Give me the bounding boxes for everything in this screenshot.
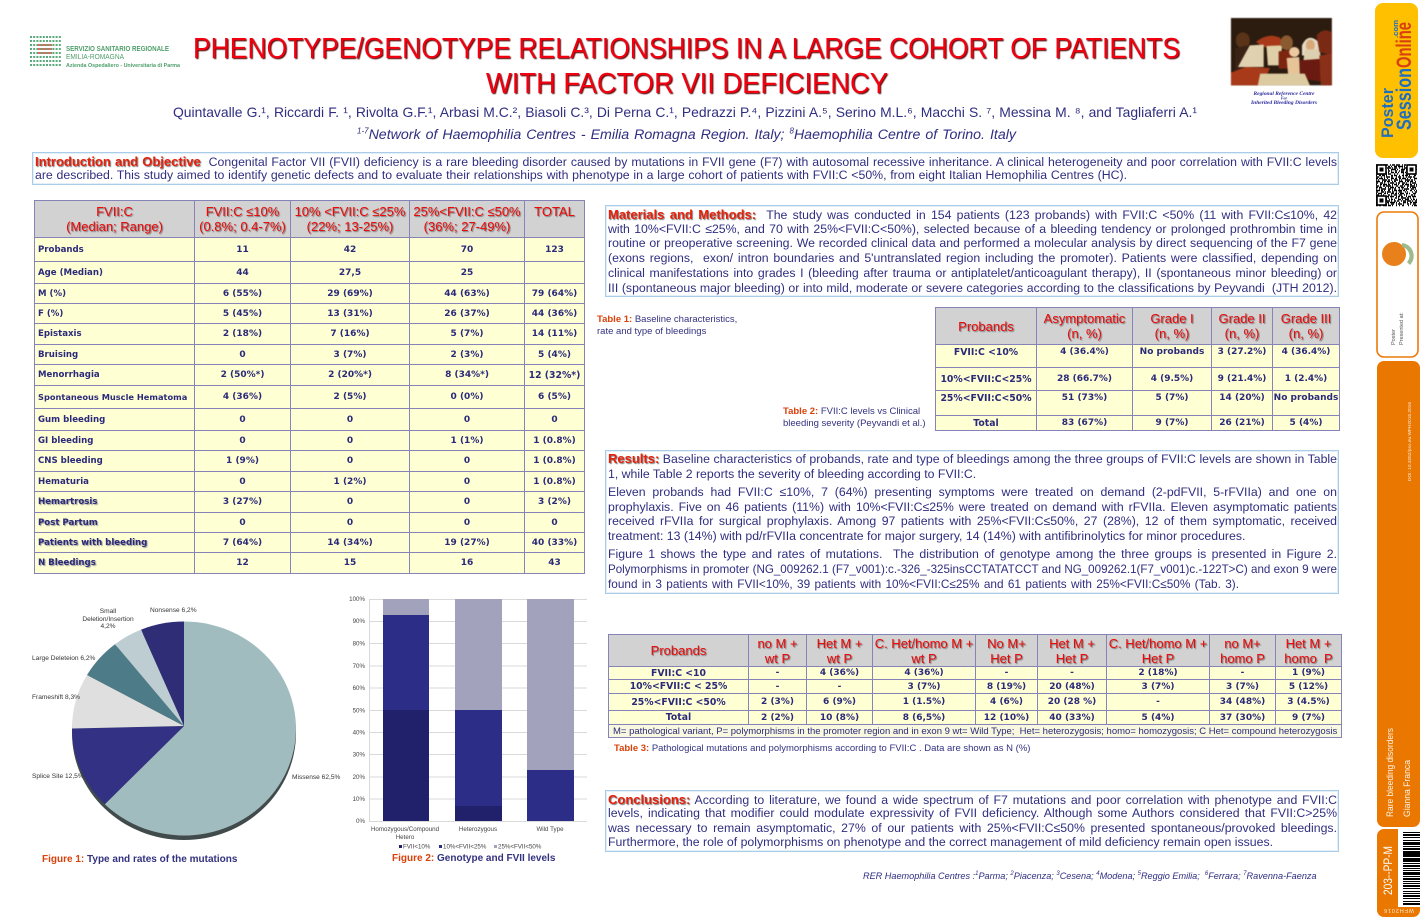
panel: materials and methods: clinical manifestations into grades I (bleeding after trauma or antiplatelet/anticoagulant therapy), II (spontaneous minor bleeding) or	[608, 266, 1337, 280]
table 3: pathological mutations and polymorphisms: no M +	[757, 636, 798, 651]
table 2: FVII:C levels vs clinical bleeding severity: 51 (73%)	[1062, 393, 1107, 403]
table 1: baseline characteristics: (22%; 13-25%)	[307, 219, 393, 234]
table 1: baseline characteristics: 2 (3%)	[451, 350, 483, 360]
table 3: pathological mutations and polymorphisms: 9 (7%)	[1292, 712, 1325, 722]
table 1: baseline characteristics: 1 (9%)	[226, 456, 259, 466]
table 1: baseline characteristics: 6 (5%)	[538, 392, 571, 402]
table 3: pathological mutations and polymorphisms: 25%<FVII:C <50%	[631, 696, 726, 708]
table 3: pathological mutations and polymorphisms: 8 (6,5%)	[903, 712, 945, 722]
table 3: pathological mutations and polymorphisms: 2 (18%)	[1138, 668, 1178, 678]
PosterSessionOnline logo panel: .com	[1391, 20, 1400, 38]
caption: table 1: rate and type of bleedings	[597, 326, 706, 337]
table 1: baseline characteristics: 1 (2%)	[334, 476, 366, 486]
table 3: pathological mutations and polymorphisms: 20 (48%)	[1049, 682, 1095, 692]
table 3: pathological mutations and polymorphisms: 2 (3%)	[761, 697, 794, 707]
table 1: baseline characteristics: Epistaxis	[38, 329, 82, 339]
panel: conclusions: was necessary to remain asymptomatic, 27% of our patients with 25%<FVII:C≤50% presented spontaneous/provoked bleedings.	[608, 821, 1337, 835]
table 3: pathological mutations and polymorphisms: 3 (7%)	[1226, 682, 1259, 692]
pie chart: type and rates of the mutations: Small	[100, 608, 117, 615]
table 2: FVII:C levels vs clinical bleeding severity: 3 (27.2%)	[1218, 347, 1266, 357]
table 1: baseline characteristics: 44 (36%)	[532, 308, 577, 318]
table 1: baseline characteristics: F (%)	[38, 308, 63, 318]
table 2: FVII:C levels vs clinical bleeding severity	[935, 307, 1340, 431]
table 3: pathological mutations and polymorphisms: C. Het/homo M +	[875, 636, 973, 651]
poster ID and barcode	[1377, 829, 1420, 917]
table 2: FVII:C levels vs clinical bleeding severity: Total	[973, 418, 999, 428]
table 1: baseline characteristics: 0	[464, 497, 470, 507]
table 2: FVII:C levels vs clinical bleeding severity: Probands	[958, 318, 1014, 334]
stacked bar chart: genotype and FVII levels: 10%<FVII<25%	[443, 844, 487, 850]
table 3: pathological mutations and polymorphisms: FVII:C <10	[651, 668, 706, 678]
table 3: pathological mutations and polymorphisms: -	[1005, 668, 1008, 678]
table 1: baseline characteristics: 0	[551, 518, 558, 528]
table 3: pathological mutations and polymorphisms: Het P	[990, 651, 1023, 666]
table 1: baseline characteristics: N Bleedings	[38, 558, 96, 568]
panel: conclusions: Furthermore, the role of polymorphisms on phenotype and the correct management of mild deficiency remain open issues.	[608, 835, 1273, 849]
sidebar: PosterSessionOnline	[1375, 3, 1420, 917]
presented at panel: Presented at:	[1399, 312, 1405, 345]
stacked bar chart: genotype and FVII levels: Heterozygous	[459, 826, 497, 833]
table 1: baseline characteristics: 0	[347, 518, 353, 528]
table 2: FVII:C levels vs clinical bleeding severity: (n, %)	[1289, 326, 1323, 341]
stacked bar chart: genotype and FVII levels: 70%	[353, 663, 365, 670]
table 1: baseline characteristics: 25%<FVII:C ≤50%	[413, 204, 521, 219]
table 1: baseline characteristics: 3 (7%)	[334, 350, 366, 360]
table 3: pathological mutations and polymorphisms: -	[1241, 668, 1244, 678]
table 1: baseline characteristics: 0	[347, 436, 353, 446]
table 1: baseline characteristics: 3 (27%)	[223, 497, 262, 507]
table 1: baseline characteristics: 14 (11%)	[532, 329, 577, 339]
table 2: FVII:C levels vs clinical bleeding severity: Grade II	[1219, 311, 1265, 326]
caption: table 3: Table 3: Pathological mutations and polymorphisms according to FVII:C . Data are shown as N (%)	[614, 743, 1030, 754]
table 1: baseline characteristics: 4 (36%)	[223, 392, 262, 402]
PosterSessionOnline logo panel: Online	[1393, 22, 1416, 68]
pie chart: type and rates of the mutations: Splice Site 12,5%	[32, 773, 84, 780]
table 1: baseline characteristics: 26 (37%)	[444, 308, 490, 318]
panel: introduction and objective	[32, 152, 1339, 185]
stacked bar chart: genotype and FVII levels: 0%	[356, 818, 365, 825]
poster ID and barcode: 203--PP-M	[1381, 846, 1395, 895]
stacked bar chart: genotype and FVII levels: 90%	[353, 618, 365, 625]
table 1: baseline characteristics: (36%; 27-49%)	[424, 219, 510, 234]
table 1: baseline characteristics	[34, 200, 585, 574]
stacked bar chart: genotype and FVII levels: 60%	[353, 685, 365, 692]
logo: Servizio Sanitario Regionale	[30, 36, 180, 69]
table 2: FVII:C levels vs clinical bleeding severity: No probands	[1140, 347, 1204, 357]
table 1: baseline characteristics: FVII:C	[96, 204, 133, 219]
table 1: baseline characteristics: 12	[236, 558, 249, 568]
caption: table 1	[597, 314, 737, 337]
table 1: baseline characteristics: 0	[239, 436, 246, 446]
table 3: pathological mutations and polymorphisms: M= pathological variant, P= polymorphisms in the promoter region and in exon 9 wt= Wild Type; Het= heterozygosis; homo= homozygosis; C Het= compound heterozygosis	[613, 726, 1337, 736]
table 2: FVII:C levels vs clinical bleeding severity: 10%<FVII:C<25%	[940, 374, 1032, 384]
table 3: pathological mutations and polymorphisms: C. Het/homo M +	[1109, 636, 1207, 651]
table 1: baseline characteristics: TOTAL	[534, 204, 575, 219]
table 3: pathological mutations and polymorphisms: 37 (30%)	[1220, 712, 1265, 722]
table 3: pathological mutations and polymorphisms: -	[1070, 668, 1074, 678]
table 1: baseline characteristics: 0 (0%)	[451, 392, 483, 402]
table 3: pathological mutations and polymorphisms: no M+	[1224, 636, 1261, 651]
table 3: pathological mutations and polymorphisms: No M+	[987, 636, 1026, 651]
table 1: baseline characteristics: 0	[464, 476, 470, 486]
stacked bar chart: genotype and FVII levels: 25%<FVII<50%	[498, 844, 542, 850]
table 3: pathological mutations and polymorphisms: wt P	[765, 651, 790, 666]
table 1: baseline characteristics: 12 (32%*)	[529, 370, 580, 380]
table 1: baseline characteristics: 0	[464, 518, 470, 528]
table 1: baseline characteristics: Spontaneous Muscle Hematoma	[38, 392, 187, 402]
table 2: FVII:C levels vs clinical bleeding severity: (n, %)	[1067, 326, 1102, 341]
table 1: baseline characteristics: 2 (20%*)	[328, 370, 372, 380]
title	[193, 33, 1181, 100]
panel: results: prophylaxis. Five on 46 patients (11%) with 10%<FVII:C≤25% were treated on demand with rFVIIa. Eleven asymptomatic patients	[608, 500, 1337, 514]
table 1: baseline characteristics: 79 (64%)	[532, 288, 577, 298]
stacked bar chart: genotype and FVII levels: 100%	[349, 596, 365, 603]
table 1: baseline characteristics: 0	[347, 497, 353, 507]
table 1: baseline characteristics: (0.8%; 0.4-7%)	[199, 219, 286, 234]
table 3: pathological mutations and polymorphisms: 10%<FVII:C < 25%	[630, 681, 727, 692]
table 1: baseline characteristics: 1 (0.8%)	[533, 436, 576, 446]
table 3: pathological mutations and polymorphisms: 3 (7%)	[1142, 682, 1174, 692]
table 1: baseline characteristics: 0	[239, 350, 246, 360]
panel: results: treatment: 13 (14%) with pd/rFVIIa concentrate for major surgery, 14 (14%) with antifibrinolytics for minor procedures.	[608, 529, 1245, 543]
image: painting and regional centre: Regional Reference Centre	[1253, 91, 1315, 97]
logo: Servizio Sanitario Regionale: SERVIZIO SANITARIO REGIONALE	[66, 46, 169, 53]
table 3: pathological mutations and polymorphisms: 34 (48%)	[1220, 697, 1265, 707]
table 3: pathological mutations and polymorphisms: 4 (6%)	[990, 697, 1023, 707]
table 1: baseline characteristics: 5 (45%)	[223, 308, 262, 318]
table 1: baseline characteristics: 11	[236, 244, 249, 254]
authors: Quintavalle G.¹, Riccardi F. ¹, Rivolta G.F.¹, Arbasi M.C.², Biasoli C.³, Di Perna C.¹, Pedrazzi P.⁴, Pizzini A.⁵, Serino M.L.⁶, Macchi S. ⁷, Messina M. ⁸, and Tagliaferri A.¹	[173, 104, 1197, 120]
table 1: baseline characteristics: 10% <FVII:C ≤25%	[295, 204, 405, 219]
table 3: pathological mutations and polymorphisms: 3 (4.5%)	[1287, 697, 1330, 707]
table 3: pathological mutations and polymorphisms: 20 (28 %)	[1048, 697, 1096, 707]
poster ID and barcode: WFH2016	[1384, 907, 1414, 913]
table 3: pathological mutations and polymorphisms: 8 (19%)	[987, 682, 1026, 692]
table 2: FVII:C levels vs clinical bleeding severity: 28 (66.7%)	[1057, 374, 1112, 384]
caption: table 2: Table 2: FVII:C levels vs Clinical	[783, 406, 920, 417]
caption: figure 1: Figure 1: Type and rates of the mutations	[42, 854, 237, 865]
table 1: baseline characteristics: Hematuria	[38, 476, 89, 486]
pie chart: type and rates of the mutations: 4,2%	[100, 623, 116, 630]
caption: table 2	[783, 406, 926, 429]
title: WITH FACTOR VII DEFICIENCY	[486, 68, 888, 100]
pie chart: type and rates of the mutations: Large Deleteion 6,2%	[32, 655, 96, 662]
table 2: FVII:C levels vs clinical bleeding severity: 26 (21%)	[1219, 418, 1265, 428]
table 1: baseline characteristics: 29 (69%)	[327, 288, 373, 298]
table 1: baseline characteristics: 123	[545, 244, 564, 254]
table 3: pathological mutations and polymorphisms: 4 (36%)	[820, 668, 859, 678]
table 1: baseline characteristics: 42	[344, 244, 356, 254]
table 2: FVII:C levels vs clinical bleeding severity: 4 (36.4%)	[1060, 347, 1109, 357]
table 3: pathological mutations and polymorphisms: 4 (36%)	[904, 668, 944, 678]
table 2: FVII:C levels vs clinical bleeding severity: Asymptomatic	[1044, 311, 1125, 326]
table 1: baseline characteristics: 6 (55%)	[223, 288, 262, 298]
pie chart: type and rates of the mutations	[32, 607, 341, 840]
table 1: baseline characteristics: 19 (27%)	[444, 538, 490, 548]
table 3: pathological mutations and polymorphisms: wt P	[911, 651, 937, 666]
image: painting and regional centre	[1230, 17, 1333, 106]
table 3: pathological mutations and polymorphisms: Probands	[651, 643, 706, 658]
PosterSessionOnline logo panel: Session	[1393, 68, 1416, 130]
panel: conclusions: Conclusions: According to literature, we found a wide spectrum of F7 mutations and poor correlation with phenotype and FVII:C	[608, 792, 1337, 807]
table 1: baseline characteristics: 3 (2%)	[538, 497, 571, 507]
panel: conclusions	[605, 790, 1339, 852]
logo: Servizio Sanitario Regionale: Azienda Ospedaliero - Universitaria di Parma	[66, 63, 180, 69]
table 3: pathological mutations and polymorphisms: 5 (4%)	[1142, 712, 1174, 722]
table 3: pathological mutations and polymorphisms: 2 (2%)	[761, 712, 794, 722]
table 2: FVII:C levels vs clinical bleeding severity: (n, %)	[1225, 326, 1259, 341]
table 1: baseline characteristics: 0	[239, 518, 246, 528]
pie chart: type and rates of the mutations: Missense 62,5%	[292, 774, 341, 781]
panel: results: 1, while Table 2 reports the severity of bleeding according to FVII:C.	[608, 467, 976, 481]
table 3: pathological mutations and polymorphisms: Het M +	[1049, 636, 1095, 651]
table 1: baseline characteristics: 25	[461, 268, 473, 278]
table 3: pathological mutations and polymorphisms: -	[838, 682, 841, 692]
stacked bar chart: genotype and FVII levels: 10%	[353, 796, 365, 803]
table 1: baseline characteristics: 0	[551, 414, 558, 424]
panel: results: Eleven probands had FVII:C ≤10%, 7 (64%) presenting symptoms were treated on demand (2-pdFVII, 5-rFVIIa) and one on	[608, 485, 1337, 499]
table 1: baseline characteristics: 1 (0.8%)	[533, 476, 576, 486]
table 1: baseline characteristics: 5 (4%)	[538, 350, 571, 360]
table 3: pathological mutations and polymorphisms: wt P	[827, 651, 852, 666]
table 2: FVII:C levels vs clinical bleeding severity: Grade I	[1150, 311, 1194, 326]
panel: introduction and objective: Introduction and Objective Congenital Factor VII (FVII) deficiency is a rare bleeding disorder caused by mutations in FVII gene (F7) with autosomal recessive inheritance. A clinical heterogeneity and poor correlation with FVII:C levels	[35, 154, 1337, 169]
panel: results: found in 3 patients with FVII<10%, 39 patients with 10%<FVII:C≤25% and 61 patients with 25%<FVII:C≤50% (Tab. 3).	[608, 577, 1239, 591]
panel: introduction and objective: are described. This study aimed to identify genetic defects and to evaluate their relationships with phenotype in a large cohort of patients with FVII:C <50%, from eight Italian Hemophilia Centres (HC).	[35, 168, 1127, 182]
panel: conclusions: levels, indicating that modifier could modulate expressivity of FVII deficiency. Although some Authors considered that FVII:C>25%	[608, 806, 1337, 820]
table 1: baseline characteristics: 0	[464, 414, 470, 424]
table 1: baseline characteristics: CNS bleeding	[38, 456, 103, 466]
table 1: baseline characteristics: FVII:C ≤10%	[206, 204, 279, 219]
panel: results: received rFVIIa for surgical prophylaxis. Among 97 patients with 25%<FVII:C≤50%, 27 (28%), 12 of them symptomatic, received	[608, 514, 1337, 528]
table 2: FVII:C levels vs clinical bleeding severity: 4 (36.4%)	[1282, 347, 1330, 357]
table 1: baseline characteristics: 0	[347, 456, 353, 466]
table 1: baseline characteristics: Post Partum	[38, 518, 98, 528]
image: painting and regional centre: For	[1281, 96, 1288, 100]
topic panel	[1377, 361, 1420, 827]
image: painting and regional centre: Inherited Bleeding Disorders	[1250, 100, 1317, 106]
PosterSessionOnline logo panel: Poster	[1378, 88, 1397, 138]
table 1: baseline characteristics: 2 (50%*)	[221, 370, 264, 380]
table 2: FVII:C levels vs clinical bleeding severity: 14 (20%)	[1219, 393, 1265, 403]
table 1: baseline characteristics: Age (Median)	[38, 268, 103, 278]
caption: figure 2: Figure 2: Genotype and FVII levels	[392, 853, 555, 864]
table 1: baseline characteristics: 27,5	[339, 268, 361, 278]
PosterSessionOnline logo panel	[1375, 3, 1418, 158]
table 1: baseline characteristics: 2 (5%)	[334, 392, 366, 402]
footnote: RER haemophilia centres: RER Haemophilia Centres :1Parma; 2Piacenza; 3Cesena; 4Modena; 5Reggio Emilia; 6Ferrara; 7Ravenna-Faenza	[863, 871, 1317, 881]
table 1: baseline characteristics: 2 (18%)	[223, 329, 262, 339]
table 1: baseline characteristics: 13 (31%)	[327, 308, 373, 318]
panel: materials and methods: routine or preoperative screening. We recorded clinical data and performed a molecular analysis by direct sequencing of the F7 gene	[608, 236, 1337, 250]
table 1: baseline characteristics: 0	[347, 414, 353, 424]
table 2: FVII:C levels vs clinical bleeding severity: 5 (4%)	[1290, 418, 1322, 428]
table 1: baseline characteristics: Gum bleeding	[38, 414, 105, 424]
table 3: pathological mutations and polymorphisms: 1 (1.5%)	[903, 697, 945, 707]
table 1: baseline characteristics: Hemartrosis	[38, 497, 97, 507]
panel: materials and methods: Materials and Methods: The study was conducted in 154 patients (123 probands) with FVII:C <50% (11 with FVII:C≤10%, 42	[608, 207, 1337, 222]
table 3: pathological mutations and polymorphisms: Het M +	[1286, 636, 1331, 651]
table 1: baseline characteristics: 40 (33%)	[532, 538, 577, 548]
table 2: FVII:C levels vs clinical bleeding severity: Grade III	[1281, 311, 1331, 326]
caption: table 1: Table 1: Baseline characteristics,	[597, 314, 737, 325]
stacked bar chart: genotype and FVII levels: Hetero	[396, 834, 415, 841]
table 1: baseline characteristics: 70	[461, 244, 473, 254]
table 1: baseline characteristics: 14 (34%)	[327, 538, 373, 548]
table 2: FVII:C levels vs clinical bleeding severity: 1 (2.4%)	[1285, 374, 1327, 384]
table 2: FVII:C levels vs clinical bleeding severity: No probands	[1274, 393, 1338, 403]
table 3: pathological mutations and polymorphisms: Total	[666, 712, 691, 723]
table 1: baseline characteristics: Probands	[38, 244, 84, 254]
table 2: FVII:C levels vs clinical bleeding severity: (n, %)	[1155, 326, 1189, 341]
table 3: pathological mutations and polymorphisms: 6 (9%)	[823, 697, 856, 707]
table 2: FVII:C levels vs clinical bleeding severity: 9 (7%)	[1156, 418, 1188, 428]
stacked bar chart: genotype and FVII levels: 20%	[353, 774, 365, 781]
pie chart: type and rates of the mutations: Deletion/Insertion	[82, 616, 134, 623]
table 1: baseline characteristics: (Median; Range)	[66, 219, 163, 234]
stacked bar chart: genotype and FVII levels: FVII<10%	[403, 844, 431, 850]
stacked bar chart: genotype and FVII levels: 40%	[353, 730, 365, 736]
topic panel: Rare bleeding disorders	[1385, 728, 1395, 817]
table 3: pathological mutations and polymorphisms: 40 (33%)	[1049, 712, 1095, 722]
table 3: pathological mutations and polymorphisms: Het M +	[817, 636, 862, 651]
table 3: pathological mutations and polymorphisms: 3 (7%)	[908, 682, 940, 692]
table 3: pathological mutations and polymorphisms: -	[1156, 697, 1160, 707]
table 2: FVII:C levels vs clinical bleeding severity: 5 (7%)	[1156, 393, 1188, 403]
table 3: pathological mutations and polymorphisms: Het P	[1142, 651, 1174, 666]
table 1: baseline characteristics: 0	[239, 476, 246, 486]
pie chart: type and rates of the mutations: Frameshift 8,3%	[32, 694, 80, 701]
table 1: baseline characteristics: 5 (7%)	[451, 329, 483, 339]
table 1: baseline characteristics: Patients with bleeding	[38, 538, 147, 548]
table 3: pathological mutations and polymorphisms: 12 (10%)	[984, 712, 1029, 722]
panel: materials and methods	[605, 205, 1339, 297]
table 1: baseline characteristics: M (%)	[38, 288, 66, 298]
stacked bar chart: genotype and FVII levels	[349, 596, 587, 850]
table 3: pathological mutations and polymorphisms	[608, 634, 1342, 738]
panel: results	[605, 450, 1339, 594]
caption: table 2: bleeding severity (Peyvandi et al.)	[783, 418, 926, 429]
table 3: pathological mutations and polymorphisms: -	[776, 668, 779, 678]
table 1: baseline characteristics: 0	[464, 456, 470, 466]
panel: results: Results: Baseline characteristics of probands, rate and type of bleedings among the three groups of FVII:C levels are shown in Table	[608, 451, 1337, 466]
panel: materials and methods: III (spontaneous major bleeding) or into mild, moderate or severe categories according to the classifications by Peyvandi (JTH 2012).	[608, 281, 1337, 295]
table 3: pathological mutations and polymorphisms: 1 (9%)	[1292, 668, 1325, 678]
stacked bar chart: genotype and FVII levels: 50%	[353, 708, 365, 714]
QR code	[1376, 164, 1417, 206]
table 3: pathological mutations and polymorphisms: Het P	[1056, 651, 1088, 666]
table 1: baseline characteristics: 43	[548, 558, 561, 568]
table 1: baseline characteristics: 7 (16%)	[330, 329, 370, 339]
table 1: baseline characteristics: GI bleeding	[38, 436, 93, 446]
stacked bar chart: genotype and FVII levels: Homozygous/Compound	[371, 826, 440, 833]
table 1: baseline characteristics: 16	[461, 558, 473, 568]
panel: results: Figure 1 shows the type and rates of mutations. The distribution of genotype among the three groups is presented in Figure 2.	[608, 547, 1337, 561]
table 3: pathological mutations and polymorphisms: 5 (12%)	[1289, 682, 1328, 692]
table 3: pathological mutations and polymorphisms: homo P	[1220, 651, 1265, 666]
table 1: baseline characteristics: 8 (34%*)	[445, 370, 489, 380]
topic panel: Gianna Franca	[1402, 760, 1412, 817]
panel: results: Polymorphisms in promoter (NG_009262.1 (F7_v001):c.-326_-325insCCTATATCCT and NG_009262.1(F7_v001)c.-122T>C) and exon 9 were	[608, 563, 1337, 576]
affiliations: 1-7Network of Haemophilia Centres - Emilia Romagna Region. Italy; 8Haemophilia Centre of Torino. Italy	[357, 126, 1016, 143]
table 3: pathological mutations and polymorphisms: 10 (8%)	[820, 712, 859, 722]
table 3: pathological mutations and polymorphisms: -	[776, 682, 779, 692]
table 1: baseline characteristics: Bruising	[38, 350, 78, 360]
table 2: FVII:C levels vs clinical bleeding severity: 25%<FVII:C<50%	[940, 393, 1032, 404]
stacked bar chart: genotype and FVII levels: Wild Type	[536, 826, 564, 833]
stacked bar chart: genotype and FVII levels: 80%	[353, 640, 365, 648]
table 3: pathological mutations and polymorphisms: homo P	[1284, 651, 1333, 666]
table 2: FVII:C levels vs clinical bleeding severity: FVII:C <10%	[954, 347, 1018, 358]
table 2: FVII:C levels vs clinical bleeding severity: 83 (67%)	[1062, 418, 1107, 428]
table 2: FVII:C levels vs clinical bleeding severity: 4 (9.5%)	[1151, 374, 1193, 384]
table 1: baseline characteristics: 0	[239, 414, 246, 424]
panel: materials and methods: (exons regions, exon/ intron boundaries and 5'untranslated region including the promoter). Patients were classified, depending on	[608, 251, 1337, 265]
table 1: baseline characteristics: 7 (64%)	[223, 538, 262, 548]
table 1: baseline characteristics: Menorrhagia	[38, 370, 100, 380]
table 2: FVII:C levels vs clinical bleeding severity: 9 (21.4%)	[1218, 374, 1266, 384]
panel: materials and methods: with 10%<FVII:C ≤25%, and 70 with 25%<FVII:C<50%), selected because of a bleeding tendency or prolonged prothrombin time in	[608, 222, 1337, 236]
pie chart: type and rates of the mutations: Nonsense 6,2%	[150, 607, 197, 614]
presented at panel: Poster	[1391, 329, 1397, 345]
stacked bar chart: genotype and FVII levels: 30%	[353, 752, 365, 758]
table 1: baseline characteristics: 1 (1%)	[451, 436, 483, 446]
table 1: baseline characteristics: 1 (0.8%)	[533, 456, 576, 466]
table 1: baseline characteristics: 44	[236, 268, 249, 278]
logo: Servizio Sanitario Regionale: EMILIA-ROMAGNA	[66, 54, 124, 61]
topic panel: DOI: 10.3252/pso.eu.WFH2016.2016	[1407, 402, 1412, 481]
table 1: baseline characteristics: 15	[344, 558, 356, 568]
presented at panel	[1377, 212, 1418, 357]
table 1: baseline characteristics: 44 (63%)	[444, 288, 490, 298]
